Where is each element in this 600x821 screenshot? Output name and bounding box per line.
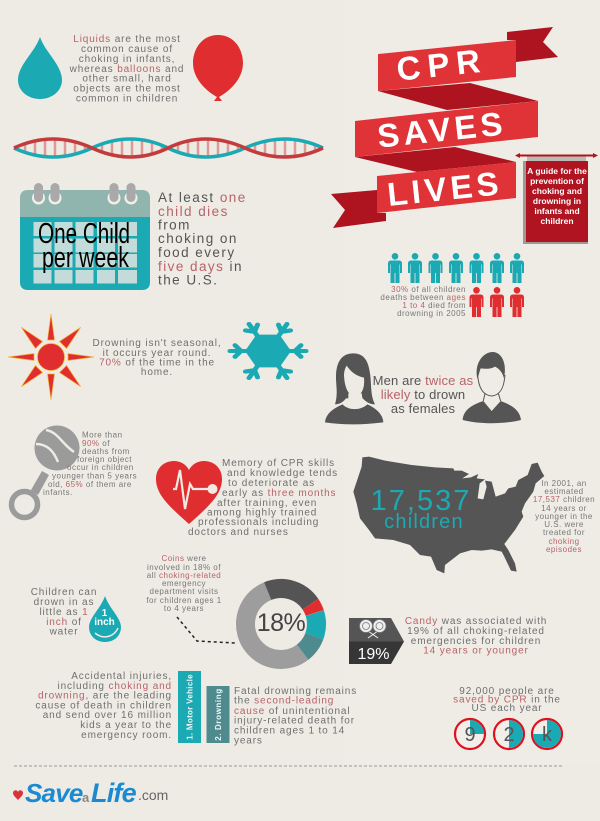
banner: guide description: infants and: [534, 206, 580, 216]
icon: DNA helix divider: [14, 139, 323, 157]
heading word: CPR: CPR: [395, 41, 489, 88]
text: coins: department visits: [150, 587, 218, 596]
donut chart: 18 percent: [231, 574, 331, 674]
logo: Save a Life: Life: [91, 778, 137, 808]
text: coins: emergency: [162, 579, 206, 588]
icon: calendar: [20, 183, 150, 290]
text: one child dies: the U.S.: [158, 272, 218, 288]
text: memory of CPR skills: among highly trained: [207, 508, 317, 518]
bar: drowning: [206, 686, 230, 743]
banner: guide description: drowning in: [533, 196, 581, 206]
banner: guide description: prevention of: [530, 176, 584, 186]
text: coins: all choking-related: [147, 571, 221, 580]
logo: Save a Life: [13, 778, 168, 808]
icon: man: [463, 352, 521, 423]
text: drowning not seasonal: [93, 338, 221, 378]
text: accidental injuries: emergency room.: [81, 730, 172, 741]
text: memory of CPR skills: to deteriorate as: [228, 478, 315, 489]
text: treated for choking episodes: choking: [548, 537, 580, 546]
text: one child dies: child dies: [158, 204, 229, 219]
text: treated for choking episodes: treated for: [543, 528, 585, 537]
text: accidental injuries: cause of death in children: [35, 700, 172, 712]
text: fatal drowning: [234, 686, 357, 746]
text: 92,000 saved: US each year: [471, 703, 543, 714]
text: drown in one inch: drown in as: [34, 597, 94, 608]
icon: one inch drop: inch: [94, 617, 115, 628]
text: treated for choking episodes: episodes: [546, 545, 582, 554]
text: candy: [405, 616, 547, 656]
donut chart: 18 percent: 18%: [257, 609, 306, 637]
banner: guide description: choking and: [532, 186, 582, 196]
text: men twice as likely: [373, 373, 474, 416]
text: drowning not seasonal: it occurs year round.: [103, 348, 211, 359]
icon: heart with pulse: [156, 461, 222, 524]
logo: Save a Life: Save: [25, 778, 83, 808]
text: one child dies: five days in: [158, 259, 243, 274]
badge: candy 19 percent: 19%: [357, 646, 390, 663]
text: memory of CPR skills: professionals including: [198, 517, 319, 528]
text: men twice as likely: Men are twice as: [373, 373, 474, 388]
counter: 92k: 2: [503, 724, 515, 746]
text: treated for choking episodes: younger in the: [535, 512, 593, 521]
text: candy: 14 years or younger: [423, 646, 529, 656]
icon: baby rattle: [12, 426, 80, 518]
map: United States with 17,537 children: [353, 457, 544, 573]
text: candy: 19% of all choking-related: [407, 626, 545, 637]
text: foreign object deaths: infants.: [43, 488, 73, 497]
text: treated for choking episodes: estimated: [544, 487, 584, 496]
text: memory of CPR skills: early as three months: [222, 488, 336, 499]
counter: 92k: 9: [464, 724, 476, 746]
pictogram: 30 percent of deaths: [380, 253, 524, 318]
text: liquids and balloons: common cause of: [81, 44, 173, 55]
logo: Save a Life: a: [82, 790, 90, 805]
text: drown in one inch: inch of: [46, 617, 82, 628]
icon: snowflake: [230, 321, 306, 381]
text: accidental injuries: and send over 16 million: [43, 710, 172, 721]
text: foreign object deaths: More than: [82, 430, 123, 440]
banner: guide description: children: [540, 216, 574, 226]
text: liquids and balloons: other small, hard: [82, 74, 172, 84]
icon: one inch drop: 1: [102, 608, 108, 619]
text: accidental injuries: including choking and: [58, 681, 172, 692]
text: fatal drowning: the second-leading: [234, 696, 334, 706]
bar: motor vehicle: 1. Motor Vehicle: [186, 674, 194, 740]
text: one child dies: from: [158, 218, 191, 232]
text: coins: [146, 554, 222, 613]
text: one child dies: food every: [158, 245, 236, 260]
text: memory of CPR skills: and knowledge tends: [227, 468, 338, 479]
text: treated for choking episodes: In 2001, an: [541, 479, 587, 488]
text: coins: Coins were: [161, 554, 207, 563]
text: foreign object deaths: 90% of: [82, 439, 110, 448]
text: liquids and balloons: common in children: [76, 94, 178, 104]
text: fatal drowning: Fatal drowning remains: [234, 686, 357, 697]
text: coins: for children ages 1: [146, 596, 222, 605]
text: drown in one inch: [31, 587, 97, 638]
text: one child dies: choking on: [158, 231, 238, 246]
bar: drowning: 2. Drowning: [214, 688, 223, 741]
pictogram: 30 percent of deaths: 30% of all children: [391, 285, 466, 294]
text: candy: Candy was associated with: [405, 616, 547, 627]
banner: guide description: A guide for the: [527, 166, 587, 176]
text: foreign object deaths: deaths from: [82, 447, 130, 456]
ribbon title: CPR saves lives: [331, 27, 558, 228]
text: drown in one inch: little as 1: [39, 607, 89, 618]
pictogram: 30 percent of deaths: deaths between ages: [380, 293, 466, 302]
text: foreign object deaths: younger than 5 years: [52, 472, 137, 480]
text: fatal drowning: cause of unintentional: [234, 706, 350, 717]
text: foreign object deaths: foreign object: [77, 455, 132, 464]
text: accidental injuries: kids a year to the: [80, 720, 172, 731]
text: fatal drowning: injury-related death for: [234, 716, 355, 726]
logo: Save a Life: .com: [138, 787, 168, 803]
text: foreign object deaths: old, 65% of them are: [48, 480, 132, 489]
text: treated for choking episodes: U.S. were: [544, 520, 584, 529]
text: candy: emergencies for children: [411, 636, 541, 647]
text: memory of CPR skills: doctors and nurses: [188, 527, 289, 538]
icon: sun: [8, 314, 94, 400]
icon: balloon: [193, 35, 243, 101]
text: one child dies: [158, 190, 247, 288]
text: men twice as likely: as females: [391, 401, 456, 416]
text: 92,000 saved: saved by CPR in the: [453, 694, 561, 706]
text: drowning not seasonal: Drowning isn't seasonal,: [93, 338, 221, 349]
big number: 17,537: [371, 485, 471, 517]
counter: 92k: [455, 719, 562, 749]
text: one child dies: At least one: [158, 190, 247, 205]
heading word: LIVES: LIVES: [386, 164, 504, 213]
text: 92,000 saved: [453, 686, 561, 714]
text: coins: involved in 18% of: [147, 563, 221, 572]
text: drowning not seasonal: home.: [141, 367, 173, 378]
text: drown in one inch: Children can: [31, 587, 97, 598]
counter: 92k: k: [542, 724, 553, 746]
text: 92,000 saved: 92,000 people are: [459, 686, 555, 697]
bar: motor vehicle: [178, 671, 201, 743]
icon: water drop: [18, 37, 62, 99]
text: liquids and balloons: choking in infants,: [79, 54, 175, 65]
text: liquids and balloons: Liquids are the most: [73, 34, 181, 45]
icon: calendar: One Child: [38, 218, 130, 250]
icon: one inch drop: [89, 596, 121, 642]
arrow: dashed leader: [177, 617, 235, 643]
pictogram: 30 percent of deaths: 1 to 4 died from: [402, 301, 466, 310]
text: accidental injuries: drowning, are the leading: [38, 690, 172, 702]
text: treated for choking episodes: 17,537 children: [533, 495, 595, 504]
text: memory of CPR skills: [188, 458, 338, 538]
big number label: children: [384, 511, 464, 533]
icon: calendar: per week: [42, 242, 129, 274]
text: liquids and balloons: [69, 34, 184, 104]
text: drowning not seasonal: 70% of the time in the: [99, 358, 215, 368]
text: memory of CPR skills: after training, even: [217, 498, 317, 509]
banner: guide description: [515, 153, 598, 244]
text: accidental injuries: Accidental injuries,: [71, 671, 172, 682]
badge: candy 19 percent: [349, 618, 404, 664]
text: liquids and balloons: objects are the most: [73, 84, 181, 94]
text: drown in one inch: water: [49, 626, 78, 638]
text: liquids and balloons: whereas balloons and: [69, 64, 184, 75]
pictogram: 30 percent of deaths: drowning in 2005: [397, 309, 466, 318]
text: men twice as likely: likely to drown: [381, 387, 465, 402]
text: foreign object deaths: occur in children: [67, 463, 134, 472]
icon: woman: [325, 353, 383, 424]
text: coins: to 4 years: [164, 604, 204, 613]
text: memory of CPR skills: Memory of CPR skills: [222, 458, 335, 469]
text: treated for choking episodes: 14 years or: [541, 504, 587, 513]
text: accidental injuries: [35, 671, 172, 741]
text: fatal drowning: children ages 1 to 14: [234, 726, 345, 736]
text: treated for choking episodes: [533, 479, 595, 554]
text: fatal drowning: years: [234, 736, 263, 746]
heading word: SAVES: SAVES: [375, 104, 508, 155]
text: foreign object deaths: [43, 430, 137, 497]
